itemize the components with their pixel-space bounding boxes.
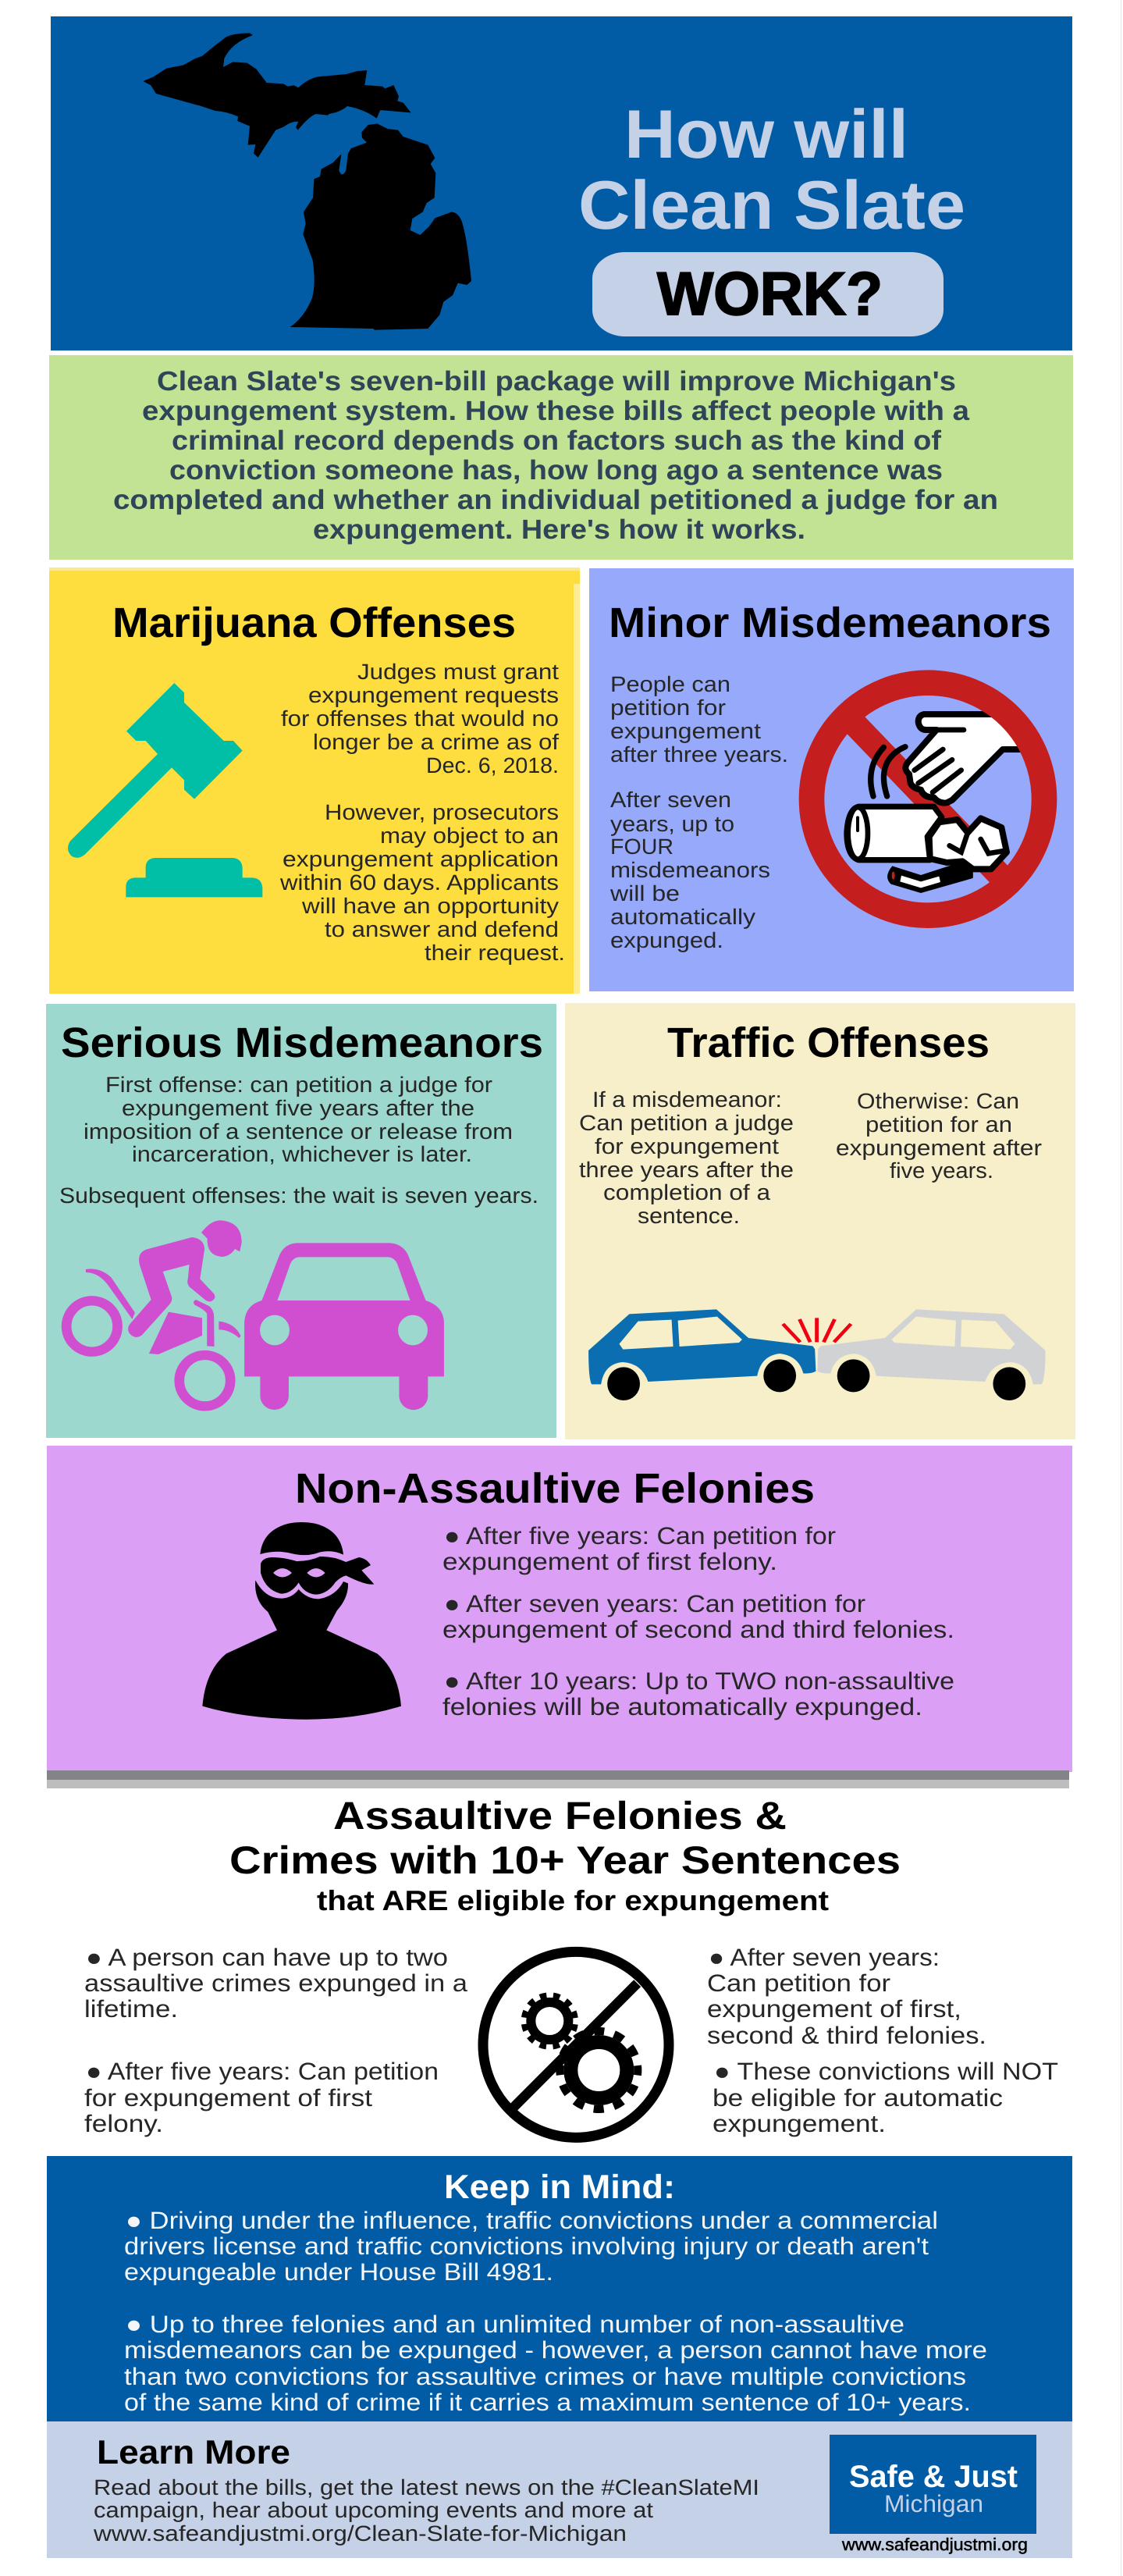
text block: if a misdemeanor: Can petition a judge <box>579 1111 794 1135</box>
text block: learn more details: Read about the bills, get the latest news on the #CleanSlateMI <box>94 2475 759 2500</box>
text block: right list: ● After seven years: <box>709 1944 940 1971</box>
text block: prosecutors may object: will have an opportunity <box>301 894 559 918</box>
panel: introduction: Clean Slate's seven-bill package will improve Michigan's <box>157 366 956 397</box>
text block: driving convictions: ● Driving under the influence, traffic convictions under a commercial <box>126 2207 938 2234</box>
text block: felony timeline list: felonies will be automatically expunged. <box>442 1693 922 1720</box>
icon: no littering sign <box>812 683 1044 916</box>
heading: Traffic Offenses <box>667 1019 990 1066</box>
website address: www.safeandjustmi.org <box>841 2535 1028 2554</box>
text block: people can petition: petition for <box>610 696 726 720</box>
text block: prosecutors may object: their request. <box>425 941 565 965</box>
text block: if a misdemeanor: completion of a <box>603 1180 770 1204</box>
heading: Minor Misdemeanors <box>609 600 1051 646</box>
heading: Serious Misdemeanors <box>61 1019 543 1066</box>
text block: after seven years <box>609 788 770 952</box>
text block: people can petition <box>610 672 788 767</box>
heading: Marijuana Offenses <box>112 600 516 646</box>
panel: header <box>51 16 1072 350</box>
text block: left list: lifetime. <box>84 1995 178 2023</box>
text block: driving convictions: drivers license and traffic convictions involving injury or death aren't <box>124 2233 929 2260</box>
text block: right list: expungement of first, <box>707 1995 961 2023</box>
panel: learn more <box>47 2421 1072 2558</box>
text block: right list: be eligible for automatic <box>713 2084 1003 2112</box>
text block: judges must grant: for offenses that would no <box>281 706 559 731</box>
icon: two cars colliding <box>588 1309 1046 1400</box>
text block: after seven years: After seven <box>610 788 731 812</box>
text block: prosecutors may object: may object to an <box>380 824 559 848</box>
text block: driving convictions <box>124 2207 938 2286</box>
icon: gavel <box>68 683 262 897</box>
text block: if a misdemeanor: If a misdemeanor: <box>592 1087 782 1112</box>
text block: first offense: expungement five years after the <box>122 1096 474 1120</box>
panel: non-assaultive felonies <box>47 1446 1072 1788</box>
text block: otherwise: petition for an <box>865 1112 1012 1137</box>
text block: after seven years: misdemeanors <box>610 858 770 882</box>
title <box>578 95 965 244</box>
text block: first offense <box>84 1073 513 1166</box>
panel: introduction: conviction someone has, how long ago a sentence was <box>169 455 943 486</box>
text block: after seven years: expunged. <box>610 928 723 952</box>
heading: Keep in Mind: <box>444 2169 675 2206</box>
panel: minor misdemeanors <box>589 568 1074 991</box>
panel: introduction: expungement system. How these bills affect people with a <box>142 396 970 426</box>
text block: prosecutors may object <box>279 800 565 965</box>
text block: right list: ● These convictions will NOT <box>714 2058 1058 2085</box>
panel: keep in mind <box>47 2156 1072 2421</box>
panel: introduction: criminal record depends on factors such as the kind of <box>172 425 941 456</box>
text block: judges must grant: Dec. 6, 2018. <box>426 753 559 777</box>
text block: left list <box>84 1944 468 2137</box>
panel: traffic offenses <box>565 1003 1075 1439</box>
text block: felony timeline list: expungement of second and third felonies. <box>442 1616 954 1643</box>
text block: if a misdemeanor: for expungement <box>595 1134 779 1158</box>
heading: Learn More <box>97 2434 290 2471</box>
text block: if a misdemeanor: sentence. <box>638 1204 740 1228</box>
text block: prosecutors may object: within 60 days. Applicants <box>279 870 559 895</box>
text block: felony timeline list: ● After seven years: Can petition for <box>444 1590 865 1617</box>
heading: Crimes with 10+ Year Sentences <box>229 1838 901 1882</box>
text block: left list: ● A person can have up to two <box>86 1944 448 1971</box>
text block: after seven years: FOUR <box>610 834 673 859</box>
text block: after seven years: automatically <box>610 905 755 929</box>
text block: felony timeline list <box>442 1522 954 1720</box>
text block: people can petition: expungement <box>610 719 761 743</box>
text block: right list: expungement. <box>713 2110 886 2137</box>
text block: people can petition: after three years. <box>610 742 788 767</box>
text block: driving convictions: expungeable under House Bill 4981. <box>124 2258 553 2286</box>
icon: Michigan map silhouette <box>143 33 471 330</box>
text block: left list: for expungement of first <box>84 2084 372 2112</box>
heading <box>229 1794 901 1916</box>
text block: left list: assaultive crimes expunged in a <box>84 1969 468 1997</box>
text block: if a misdemeanor: three years after the <box>579 1158 794 1182</box>
text block: people can petition: People can <box>610 672 730 696</box>
panel: serious misdemeanors <box>46 1004 556 1438</box>
text block: prosecutors may object: to answer and defend <box>325 917 559 941</box>
text block: otherwise: five years. <box>890 1158 993 1183</box>
text block: right list <box>707 1944 1058 2137</box>
text block: if a misdemeanor <box>579 1087 794 1228</box>
text block: otherwise: Otherwise: Can <box>857 1089 1019 1113</box>
text block: prosecutors may object: However, prosecutors <box>325 800 559 824</box>
text block: subsequent offenses: Subsequent offenses: the wait is seven years. <box>59 1183 538 1208</box>
heading: Non-Assaultive Felonies <box>295 1465 815 1512</box>
icon: bicycle and car collision <box>66 1220 444 1410</box>
text block: felony limits: of the same kind of crime if it carries a maximum sentence of 10+ years. <box>124 2389 971 2416</box>
heading: Assaultive Felonies & <box>333 1794 787 1838</box>
panel: assaultive felonies <box>84 1794 1058 2137</box>
text block: felony timeline list: ● After five years: Can petition for <box>444 1522 836 1550</box>
panel: marijuana offenses <box>49 568 580 994</box>
text block: learn more details: www.safeandjustmi.org/Clean-Slate-for-Michigan <box>93 2521 627 2546</box>
logo: Safe & Just Michigan: Michigan <box>884 2490 983 2517</box>
icon: crossed-out gears <box>483 1952 669 2137</box>
text block: felony limits: ● Up to three felonies and an unlimited number of non-assaultive <box>126 2311 904 2338</box>
text block: learn more details: campaign, hear about upcoming events and more at <box>94 2498 653 2522</box>
text block: otherwise <box>836 1089 1042 1183</box>
text block: left list: felony. <box>84 2110 163 2137</box>
text block: left list: ● After five years: Can petition <box>86 2058 439 2085</box>
logo: Safe & Just Michigan <box>830 2435 1036 2534</box>
divider bar <box>47 1770 1069 1788</box>
text block: felony limits <box>124 2311 987 2416</box>
text block: judges must grant: expungement requests <box>308 683 559 707</box>
text block: judges must grant <box>281 660 559 777</box>
callout: WORK? pill: WORK? <box>657 259 883 328</box>
text block: after seven years: years, up to <box>610 812 734 836</box>
text block: first offense: imposition of a sentence or release from <box>84 1119 513 1144</box>
text block: right list: second & third felonies. <box>707 2022 986 2049</box>
panel: introduction: completed and whether an individual petitioned a judge for an <box>113 485 998 515</box>
text block: otherwise: expungement after <box>836 1136 1042 1160</box>
icon: masked thief <box>202 1522 401 1720</box>
text block: learn more details <box>93 2475 759 2546</box>
text block: felony timeline list: expungement of first felony. <box>442 1548 777 1575</box>
panel: introduction <box>49 355 1073 560</box>
panel: introduction: expungement. Here's how it works. <box>313 514 805 545</box>
heading: that ARE eligible for expungement <box>317 1884 829 1916</box>
text block: right list: Can petition for <box>707 1969 890 1997</box>
callout: WORK? pill <box>592 252 944 336</box>
text block: judges must grant: longer be a crime as of <box>313 730 559 754</box>
title: How will <box>624 95 908 173</box>
title: Clean Slate <box>578 166 965 244</box>
text block: felony limits: than two convictions for assaultive crimes or have multiple convictions <box>124 2363 966 2390</box>
logo: Safe & Just Michigan: Safe & Just <box>849 2460 1018 2494</box>
text block: prosecutors may object: expungement application <box>283 847 559 871</box>
text block: first offense: incarceration, whichever is later. <box>132 1142 472 1166</box>
text block: felony timeline list: ● After 10 years: Up to TWO non-assaultive <box>444 1667 954 1695</box>
text block: after seven years: will be <box>609 881 680 906</box>
text block: felony limits: misdemeanors can be expunged - however, a person cannot have more <box>124 2336 987 2364</box>
text block: first offense: First offense: can petition a judge for <box>105 1073 492 1097</box>
text block: judges must grant: Judges must grant <box>357 660 559 684</box>
